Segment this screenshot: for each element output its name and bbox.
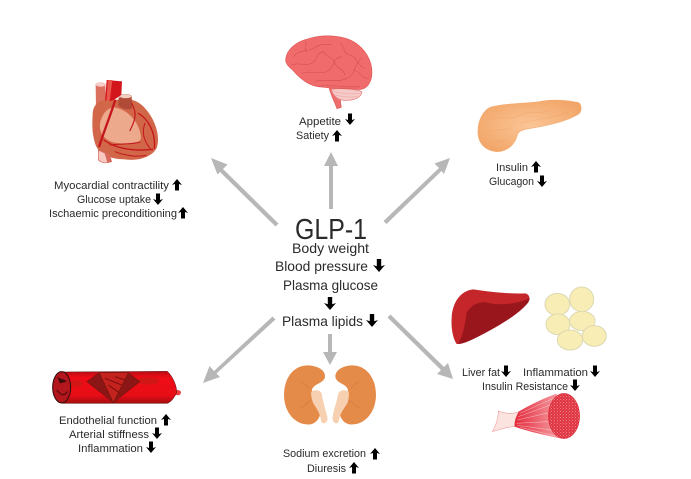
icon: brain bbox=[286, 36, 372, 109]
text block: kidney effects: Sodium excretion bbox=[283, 448, 366, 460]
text block: central effects bbox=[275, 240, 385, 329]
text block: heart effects: Ischaemic preconditioning bbox=[49, 208, 177, 220]
arrow: GLP-1 to brain bbox=[324, 152, 338, 209]
text block: kidney effects bbox=[283, 448, 380, 475]
arrow: GLP-1 to pancreas bbox=[384, 158, 450, 224]
text block: blood vessel effects: Inflammation bbox=[78, 443, 143, 455]
arrow: GLP-1 to liver, fat and muscle bbox=[388, 314, 453, 379]
arrow: GLP-1 to blood vessel bbox=[203, 316, 276, 383]
arrow: GLP-1 to heart bbox=[211, 158, 278, 226]
text block: brain effects bbox=[296, 114, 355, 142]
text block: central effects: Blood pressure bbox=[275, 258, 368, 274]
icon: fat cells bbox=[545, 287, 606, 350]
text block: central effects: Plasma lipids bbox=[282, 313, 363, 329]
text block: central effects: Body weight bbox=[292, 240, 369, 256]
icon: pancreas bbox=[478, 100, 581, 152]
text block: pancreas effects bbox=[489, 161, 547, 188]
text block: brain effects: Satiety bbox=[296, 130, 329, 142]
text block: liver, fat and muscle effects: Liver fat bbox=[462, 367, 500, 379]
icon: kidneys bbox=[284, 365, 376, 424]
text block: pancreas effects: Glucagon bbox=[489, 176, 534, 188]
text block: heart effects: Glucose uptake bbox=[77, 194, 151, 206]
arrow: GLP-1 to kidneys bbox=[323, 334, 337, 365]
text block: blood vessel effects bbox=[59, 414, 171, 455]
text block: heart effects bbox=[49, 179, 188, 220]
text block: central effects: Plasma glucose bbox=[283, 277, 378, 293]
text block: pancreas effects: Insulin bbox=[496, 162, 528, 174]
text block: brain effects: Appetite bbox=[299, 116, 341, 128]
text block: liver, fat and muscle effects bbox=[462, 366, 600, 393]
text block: liver, fat and muscle effects: Insulin Resistance bbox=[482, 381, 568, 393]
icon: muscle bbox=[492, 393, 580, 439]
text block: blood vessel effects: Endothelial function bbox=[59, 415, 157, 427]
title: GLP-1: GLP-1 bbox=[295, 214, 367, 246]
icon: heart bbox=[92, 80, 158, 163]
text block: blood vessel effects: Arterial stiffness bbox=[69, 429, 149, 441]
icon: liver bbox=[452, 289, 530, 344]
text block: liver, fat and muscle effects: Inflammation bbox=[523, 367, 588, 379]
icon: blood vessel bbox=[53, 371, 181, 403]
text block: kidney effects: Diuresis bbox=[307, 463, 346, 475]
text block: heart effects: Myocardial contractility bbox=[54, 180, 170, 192]
